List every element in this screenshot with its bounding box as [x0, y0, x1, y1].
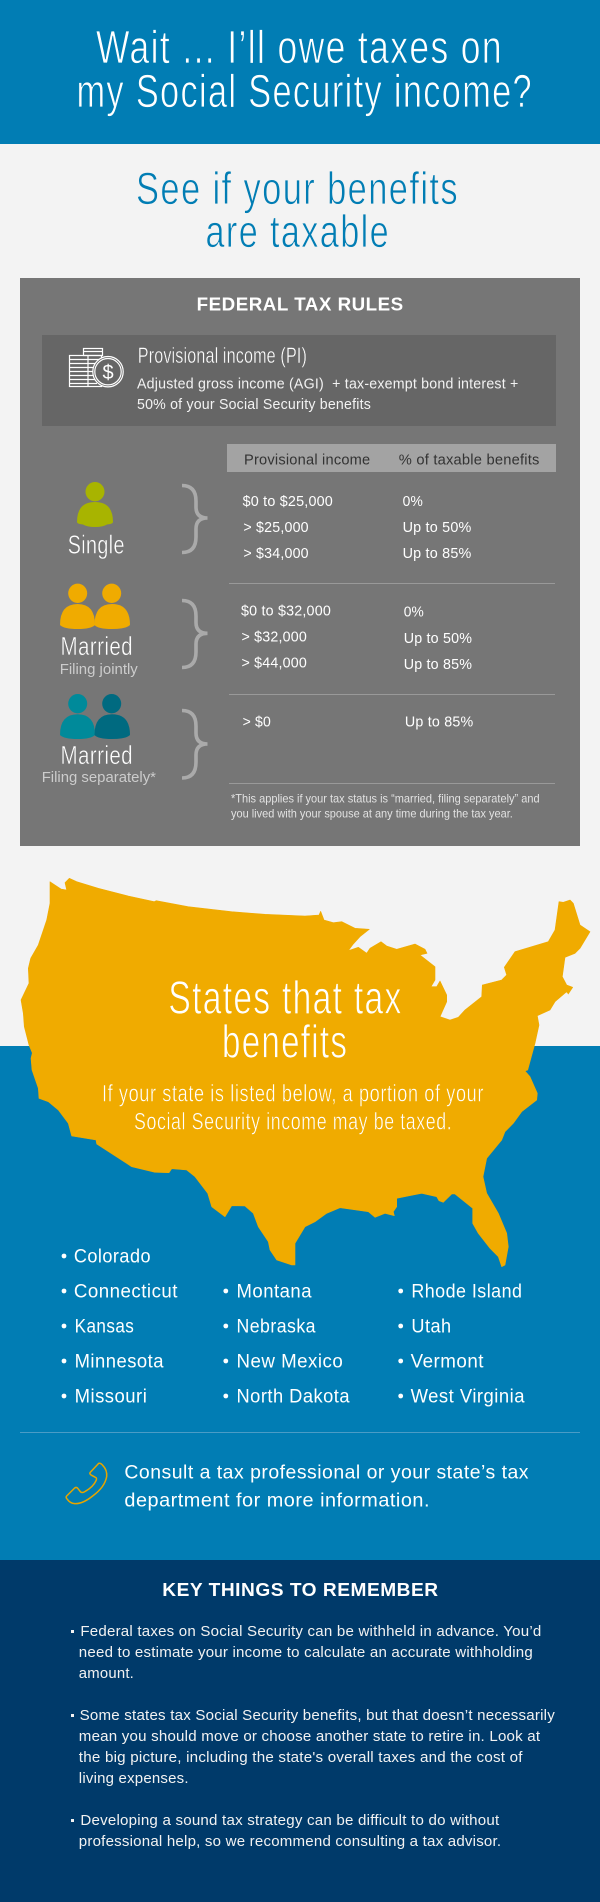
- column 2: Montana: [236, 1281, 312, 1302]
- row group: married filing jointly: [60, 584, 472, 678]
- brace: [182, 710, 208, 778]
- income rates: single: 0%: [403, 494, 423, 510]
- column 3: [398, 1281, 525, 1407]
- point 2: state taxes: the big picture, including the state's overall taxes and the cost of: [79, 1750, 523, 1766]
- panel: key things to remember: [0, 1560, 600, 1902]
- income rates: married filing jointly: > $32,000: [242, 629, 307, 645]
- income rates: single: > $34,000: [243, 546, 309, 562]
- column 2: North Dakota: [236, 1386, 350, 1407]
- heading: states that tax benefits: [168, 971, 403, 1067]
- icon: telephone: [66, 1463, 107, 1504]
- table header: Provisional income: [244, 452, 370, 468]
- provisional income box: [42, 335, 556, 426]
- column 3: Utah: [411, 1316, 452, 1337]
- map intro text: [102, 1081, 484, 1135]
- section heading: see if your benefits are taxable: are taxable: [206, 206, 390, 257]
- income rates: single: Up to 85%: [403, 546, 472, 562]
- point 3: professional help: professional help, so we recommend consulting a tax advisor.: [79, 1834, 501, 1850]
- header banner: [0, 0, 600, 144]
- point 3: professional help: Developing a sound tax strategy can be difficult to do without: [80, 1813, 499, 1829]
- income rates: married filing separately: Up to 85%: [405, 714, 473, 730]
- column 2: [223, 1281, 350, 1407]
- point 1: withholding: [71, 1624, 542, 1682]
- row group: married filing separately: [42, 694, 473, 786]
- footnote: *This applies if your tax status is “married, filing separately” and: [231, 792, 540, 806]
- column 2: New Mexico: [236, 1351, 343, 1372]
- icon: documents and dollar coin: [70, 348, 123, 387]
- label: filing separately: Filing separately*: [42, 769, 156, 786]
- income rates: married filing jointly: Up to 85%: [404, 657, 472, 673]
- icon: couple: [60, 584, 130, 629]
- row group: single: [68, 482, 471, 562]
- icon: single person: [77, 482, 113, 527]
- column 1: Minnesota: [75, 1351, 164, 1372]
- income rates: single: > $25,000: [243, 520, 309, 536]
- label: filing jointly: Filing jointly: [60, 661, 138, 678]
- point 2: state taxes: mean you should move or choose another state to retire in. Look at: [79, 1729, 540, 1745]
- label: married: Married: [60, 631, 133, 661]
- income rates: married filing separately: > $0: [243, 714, 271, 730]
- consult callout: [124, 1461, 529, 1511]
- provisional income formula: Adjusted gross income (AGI) + tax-exempt bond interest +: [137, 376, 518, 392]
- point 1: withholding: need to estimate your income to calculate an accurate withholding: [79, 1645, 533, 1661]
- map: contiguous United States: [21, 878, 590, 1267]
- panel: federal tax rules: [20, 278, 580, 846]
- column 3: Vermont: [411, 1351, 484, 1372]
- point 2: state taxes: living expenses.: [79, 1771, 189, 1787]
- brace: [182, 486, 208, 552]
- column 2: Nebraska: [236, 1316, 316, 1337]
- icon: separated couple: [60, 694, 130, 739]
- consult callout: department for more information.: [124, 1489, 430, 1511]
- consult callout: Consult a tax professional or your state’s tax: [124, 1461, 529, 1483]
- blue states panel: [0, 1046, 600, 1560]
- map intro text: Social Security income may be taxed.: [134, 1108, 452, 1135]
- label: married: Married: [60, 740, 133, 770]
- income rates: married filing separately: [243, 714, 473, 730]
- column 1: Connecticut: [74, 1281, 178, 1302]
- footnote: [231, 792, 540, 821]
- list of states: [62, 1246, 525, 1407]
- column 1: [62, 1246, 178, 1407]
- point 1: withholding: Federal taxes on Social Security can be withheld in advance. You’d: [80, 1624, 542, 1640]
- column 3: West Virginia: [411, 1386, 525, 1407]
- column 3: Rhode Island: [411, 1281, 522, 1302]
- income rates: single: $0 to $25,000: [243, 494, 333, 510]
- provisional income formula: 50% of your Social Security benefits: [137, 397, 371, 413]
- brace: [182, 600, 208, 668]
- provisional income formula: [137, 376, 518, 413]
- point 2: state taxes: Some states tax Social Security benefits, but that doesn’t necessarily: [80, 1708, 556, 1724]
- panel heading: FEDERAL TAX RULES: [197, 294, 404, 315]
- icon: documents and dollar coin: $: [102, 362, 114, 384]
- heading: states that tax benefits: benefits: [222, 1015, 348, 1067]
- income rates: married filing jointly: 0%: [404, 605, 424, 621]
- income rates: married filing jointly: [241, 603, 472, 673]
- table header: [227, 444, 556, 472]
- footnote: you lived with your spouse at any time during the tax year.: [231, 807, 513, 821]
- point 2: state taxes: [71, 1708, 556, 1787]
- column 1: Missouri: [75, 1386, 147, 1407]
- income rates: married filing jointly: $0 to $32,000: [241, 603, 331, 619]
- heading: states that tax benefits: States that tax: [168, 971, 403, 1023]
- section heading: see if your benefits are taxable: See if your benefits: [136, 163, 459, 214]
- map intro text: If your state is listed below, a portion of your: [102, 1081, 484, 1108]
- label: single: Single: [68, 529, 125, 559]
- panel heading: KEY THINGS TO REMEMBER: [162, 1579, 439, 1600]
- column 1: Colorado: [74, 1246, 151, 1267]
- table header: % of taxable benefits: [399, 452, 540, 468]
- income rates: single: Up to 50%: [403, 520, 472, 536]
- provisional income heading: Provisional income (PI): [138, 343, 307, 368]
- section heading: see if your benefits are taxable: [136, 163, 459, 257]
- income rates: married filing jointly: Up to 50%: [404, 631, 472, 647]
- income rates: single: [243, 494, 472, 562]
- title: [76, 21, 533, 117]
- point 1: withholding: amount.: [79, 1666, 134, 1682]
- point 3: professional help: [71, 1813, 501, 1850]
- column 1: Kansas: [75, 1316, 134, 1337]
- income rates: married filing jointly: > $44,000: [242, 655, 307, 671]
